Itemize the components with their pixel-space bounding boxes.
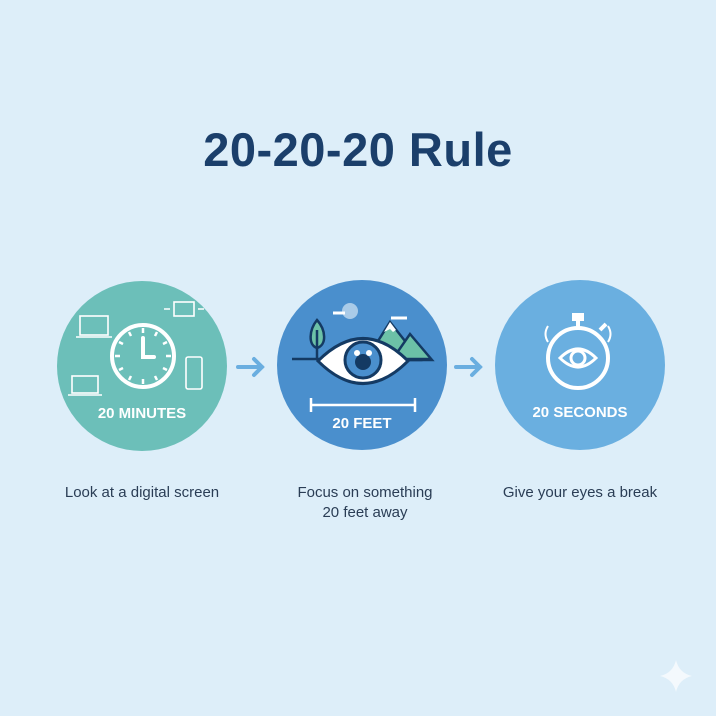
caption 3: Give your eyes a break (503, 484, 657, 501)
arrow 2 (456, 359, 480, 375)
step 1 circle: 20 minutes (57, 281, 227, 451)
step 3 circle: 20 seconds: 20 SECONDS (532, 404, 628, 421)
icon: sparkle (660, 660, 692, 692)
step 1 circle: 20 minutes: 20 MINUTES (98, 405, 186, 422)
arrow 1 (238, 359, 262, 375)
title: 20-20-20 Rule (203, 123, 513, 176)
icon: devices (68, 302, 204, 395)
icon: tree and mountains (311, 320, 432, 360)
caption 2 (297, 484, 433, 521)
icon: sun and clouds (342, 303, 358, 319)
step 2 circle: 20 feet: 20 FEET (332, 415, 392, 432)
icon: stopwatch with eye (546, 314, 610, 388)
icon: clock (112, 325, 174, 387)
caption 2: 20 feet away (322, 504, 408, 521)
distance bar (311, 398, 415, 412)
caption 1: Look at a digital screen (65, 484, 219, 501)
caption 2: Focus on something (297, 484, 433, 501)
icon: eye (318, 338, 408, 384)
step 3 circle: 20 seconds (495, 280, 665, 450)
step 2 circle: 20 feet (277, 280, 447, 450)
